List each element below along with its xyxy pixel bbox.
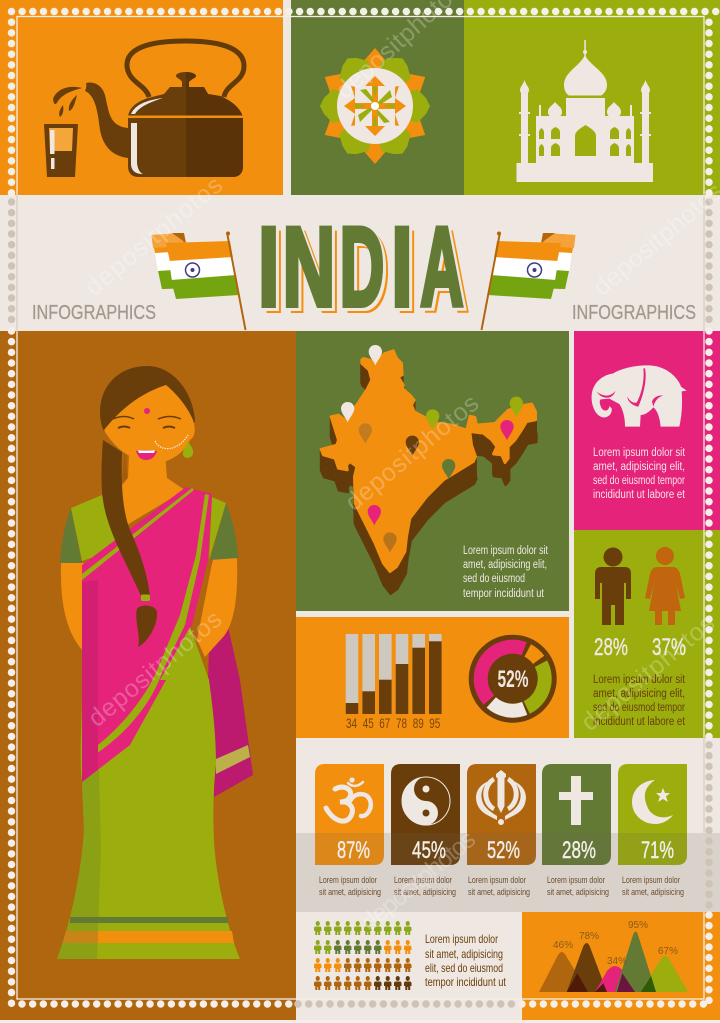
pictogram caption: Lorem ipsum dolor: [425, 932, 498, 946]
subtitle: left INFOGRAPHICS: INFOGRAPHICS: [32, 301, 156, 324]
map with shadow: [321, 345, 536, 594]
title: INDIA: A: [425, 211, 469, 335]
title: INDIA: D: [343, 208, 387, 333]
elephant caption: incididunt ut labore et: [593, 489, 686, 501]
mountain chart: 95%: [628, 920, 648, 931]
map caption: Lorem ipsum dolor sit: [463, 545, 549, 557]
religion captions: sit amet, adipisicing: [319, 887, 381, 898]
watermarks: depositphotos: [340, 389, 484, 517]
illustration: woman in sari: [57, 366, 253, 959]
title: INDIA: I: [258, 205, 279, 330]
title: INDIA: N: [283, 205, 335, 330]
icon: crescent and star: [632, 780, 673, 824]
panel: kettle: [0, 0, 283, 195]
pictogram caption: [425, 932, 507, 989]
icon: woman: [645, 547, 685, 625]
pictogram caption: elit, sed do eiusmod: [425, 961, 503, 975]
title: INDIA: I: [261, 208, 282, 333]
religion captions: Lorem ipsum dolor: [622, 875, 680, 886]
religion captions: Lorem ipsum dolor: [547, 875, 605, 886]
panel: mountain chart: [522, 912, 720, 1020]
translucent band: [296, 833, 720, 912]
panel: Taj Mahal: [464, 0, 720, 195]
female percentage: 37%: [652, 634, 686, 661]
watermarks: depositphotos: [576, 609, 720, 737]
map caption: amet, adipisicing elit,: [463, 559, 547, 571]
title: INDIA: A: [423, 209, 467, 333]
title: INDIA: [258, 205, 469, 335]
pictogram grid: [314, 921, 412, 990]
title: INDIA: I: [396, 210, 418, 335]
title: INDIA: N: [288, 210, 340, 335]
watermarks: depositphotos: [356, 825, 481, 937]
panel: charts: [296, 617, 569, 738]
tile: Christianity: [542, 764, 611, 865]
bar chart: 67: [379, 715, 390, 731]
icon: Taj Mahal silhouette: [516, 40, 653, 182]
tile: Sikhism: [467, 764, 536, 865]
title: INDIA: D: [340, 205, 384, 330]
religion percentages: 45%: [412, 837, 446, 864]
pictogram caption: sit amet, adipisicing: [425, 947, 503, 961]
bar chart: 78: [396, 715, 407, 731]
mountain chart: 34%: [607, 956, 627, 967]
title: INDIA: A: [420, 206, 464, 330]
flag: left: [152, 232, 246, 330]
religion captions: sit amet, adipisicing: [547, 887, 609, 898]
elephant caption: Lorem ipsum dolor sit: [593, 447, 686, 459]
panel: map of India: [296, 331, 569, 611]
icon: khanda: [476, 770, 526, 825]
religion captions: Lorem ipsum dolor: [468, 875, 526, 886]
mountain chart: [539, 920, 688, 992]
arches of the Taj Mahal: [539, 96, 631, 156]
bar chart: 34: [346, 715, 357, 731]
icon: mandala flower: [315, 48, 435, 164]
icon: elephant: [592, 365, 687, 427]
religion percentages: [337, 837, 674, 864]
bar chart: 95: [429, 715, 440, 731]
icon: om: [326, 779, 371, 821]
map pins: [341, 345, 523, 553]
title: INDIA: D: [345, 210, 389, 335]
title: INDIA: I: [263, 210, 284, 335]
demographics caption: Lorem ipsum dolor sit: [593, 674, 686, 686]
bar chart: 45: [363, 715, 374, 731]
panel: woman in sari: [0, 331, 296, 1020]
panel: elephant: [574, 331, 720, 530]
mountain chart: 67%: [658, 946, 678, 957]
demographics caption: incididunt ut labore et: [593, 716, 686, 728]
tile: Taoism: [391, 764, 460, 865]
elephant caption: amet, adipisicing elit,: [593, 461, 685, 473]
map caption: [463, 545, 549, 600]
religion captions: sit amet, adipisicing: [468, 887, 530, 898]
religion percentages: 52%: [487, 837, 520, 864]
religion captions: sit amet, adipisicing: [622, 887, 684, 898]
religion percentages: 28%: [562, 837, 596, 864]
elephant caption: sed do eiusmod tempor: [593, 475, 685, 487]
pictogram caption: tempor incididunt ut: [425, 975, 507, 989]
religion captions: [319, 875, 684, 898]
map caption: tempor incididunt ut: [463, 588, 545, 600]
icon: cross: [559, 776, 593, 825]
religion captions: Lorem ipsum dolor: [394, 875, 452, 886]
title: INDIA: I: [394, 208, 416, 333]
panel: mandala: [291, 0, 464, 195]
demographics caption: amet, adipisicing elit,: [593, 688, 685, 700]
bottom margin strip: [0, 1020, 720, 1023]
icon: man: [595, 548, 631, 625]
panel: man and woman statistics: [574, 530, 720, 738]
religion captions: Lorem ipsum dolor: [319, 875, 377, 886]
religion percentages: 87%: [337, 837, 370, 864]
demographics caption: sed do eiusmod tempor: [593, 702, 685, 714]
tile: Hinduism: [315, 764, 384, 865]
donut chart: 52%: [498, 666, 528, 693]
title: INDIA: N: [286, 208, 338, 333]
icon: yin yang: [402, 777, 450, 825]
donut chart: [468, 634, 558, 724]
elephant caption: [593, 447, 686, 501]
map caption: sed do eiusmod: [463, 573, 525, 585]
bar chart: [346, 634, 442, 731]
demographics caption: [593, 674, 686, 728]
panel: people pictogram: [297, 912, 517, 998]
bar chart: 89: [413, 715, 424, 731]
panel: religions: [296, 764, 720, 912]
flag: right: [482, 232, 576, 330]
title: INDIA: I: [391, 205, 413, 330]
watermarks: depositphotos: [80, 171, 228, 302]
icon: kettle and glass of chai: [44, 41, 244, 177]
male percentage: 28%: [594, 634, 628, 661]
mountain chart: 46%: [553, 940, 573, 951]
watermarks: depositphotos: [83, 605, 227, 733]
tile: Islam: [618, 764, 687, 865]
religion percentages: 71%: [641, 837, 674, 864]
mountain chart: 78%: [579, 931, 599, 942]
religion captions: sit amet, adipisicing: [394, 887, 456, 898]
